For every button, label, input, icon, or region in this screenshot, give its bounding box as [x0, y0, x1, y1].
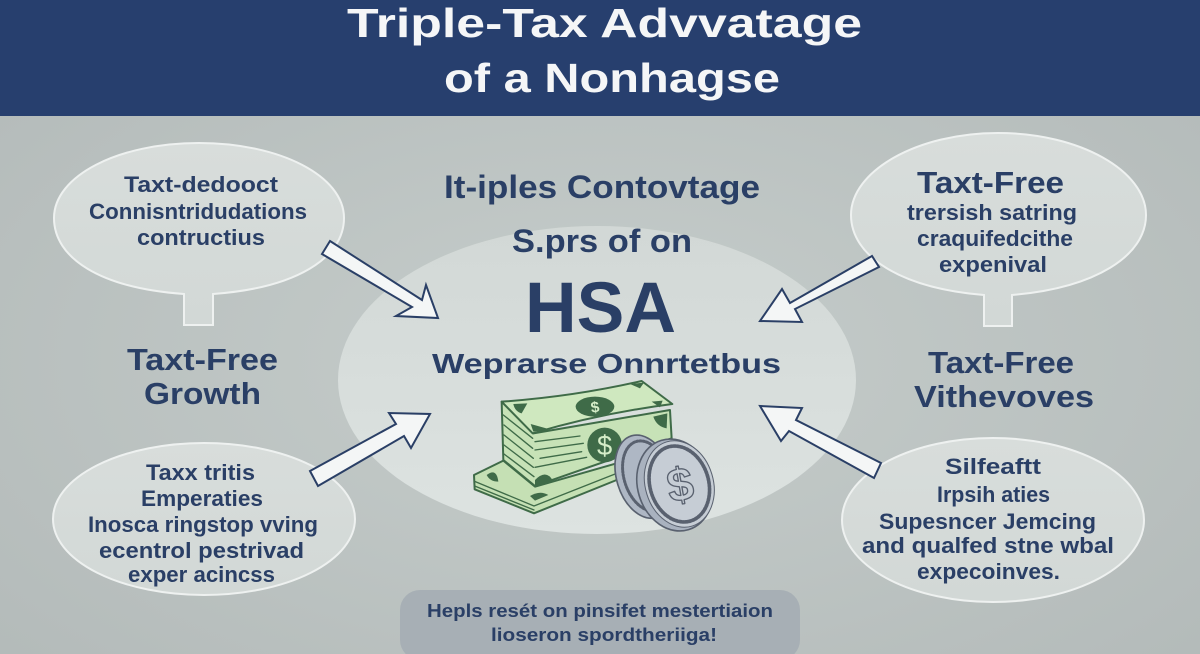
bubble text: and qualfed stne wbal: [862, 533, 1114, 558]
icon: money stack and coins: [474, 381, 725, 541]
heading: tax-free withdrawals: Taxt-Free: [928, 345, 1074, 380]
heading: tax-free withdrawals: [914, 345, 1094, 414]
callout: bottom note: [400, 590, 800, 654]
arrow: bottom-left to center: [310, 413, 430, 486]
header banner: [0, 0, 1200, 116]
bubble text: exper acincss: [128, 562, 275, 587]
stack side: [502, 402, 672, 486]
bubble text: expecoinves.: [917, 559, 1060, 584]
central heading: It-iples Contovtage: [444, 169, 760, 205]
heading: tax-free growth: [127, 342, 278, 411]
bubble text: craquifedcithe: [917, 226, 1073, 251]
bubble text: Taxt-Free: [917, 165, 1064, 200]
central subheading: Weprarse Onnrtetbus: [432, 348, 781, 379]
bubble text: Connisntridudations: [89, 199, 307, 224]
panel: central HSA ellipse: [338, 169, 856, 541]
HSA label: HSA: [525, 269, 676, 348]
panel: top-left bubble: [54, 143, 344, 325]
lower bill: [474, 461, 617, 513]
heading: tax-free withdrawals: Vithevoves: [914, 379, 1094, 414]
callout: bottom note: Hepls resét on pinsifet mestertiaion: [427, 600, 773, 621]
bubble text: [89, 172, 307, 250]
heading: tax-free growth: Growth: [144, 376, 261, 411]
arrow: bottom-right to center: [760, 406, 881, 478]
central heading: S.prs of on: [512, 223, 692, 259]
title: Triple-Tax Advvatage: [347, 0, 862, 46]
back coin: [605, 428, 683, 525]
bubble text: trersish satring: [907, 200, 1077, 225]
top bill: [502, 381, 672, 433]
arrow: top-left to center: [322, 241, 438, 318]
seal: [587, 428, 622, 462]
central heading: [444, 169, 760, 259]
front coin: [626, 429, 724, 541]
title: of a Nonhagse: [444, 55, 780, 101]
panel: top-right bubble: [851, 133, 1146, 326]
panel: bottom-left bubble: [53, 443, 355, 595]
bubble text: expenival: [939, 252, 1047, 277]
bubble text: Inosca ringstop vving: [88, 512, 318, 537]
panel: bottom-right bubble: [842, 438, 1144, 602]
title: [347, 0, 862, 101]
icon: money stack and coins: $: [597, 430, 612, 461]
bubble text: Silfeaftt: [945, 454, 1042, 479]
bubble text: Taxt-dedooct: [124, 172, 279, 197]
heading: tax-free growth: Taxt-Free: [127, 342, 278, 377]
bubble text: [907, 165, 1077, 277]
icon: money stack and coins: $: [590, 399, 601, 417]
bubble text: [88, 460, 318, 587]
bubble text: ecentrol pestrivad: [99, 538, 304, 563]
bubble text: Irpsih aties: [937, 482, 1050, 507]
bubble text: [862, 454, 1114, 584]
arrow: top-right to center: [760, 256, 879, 322]
icon: money stack and coins: $: [663, 457, 697, 513]
bubble text: Emperaties: [141, 486, 263, 511]
callout: bottom note: lioseron spordtheriiga!: [491, 624, 717, 645]
bubble text: Supesncer Jemcing: [879, 509, 1096, 534]
bubble text: Taxx tritis: [146, 460, 255, 485]
bubble text: contructius: [137, 225, 265, 250]
